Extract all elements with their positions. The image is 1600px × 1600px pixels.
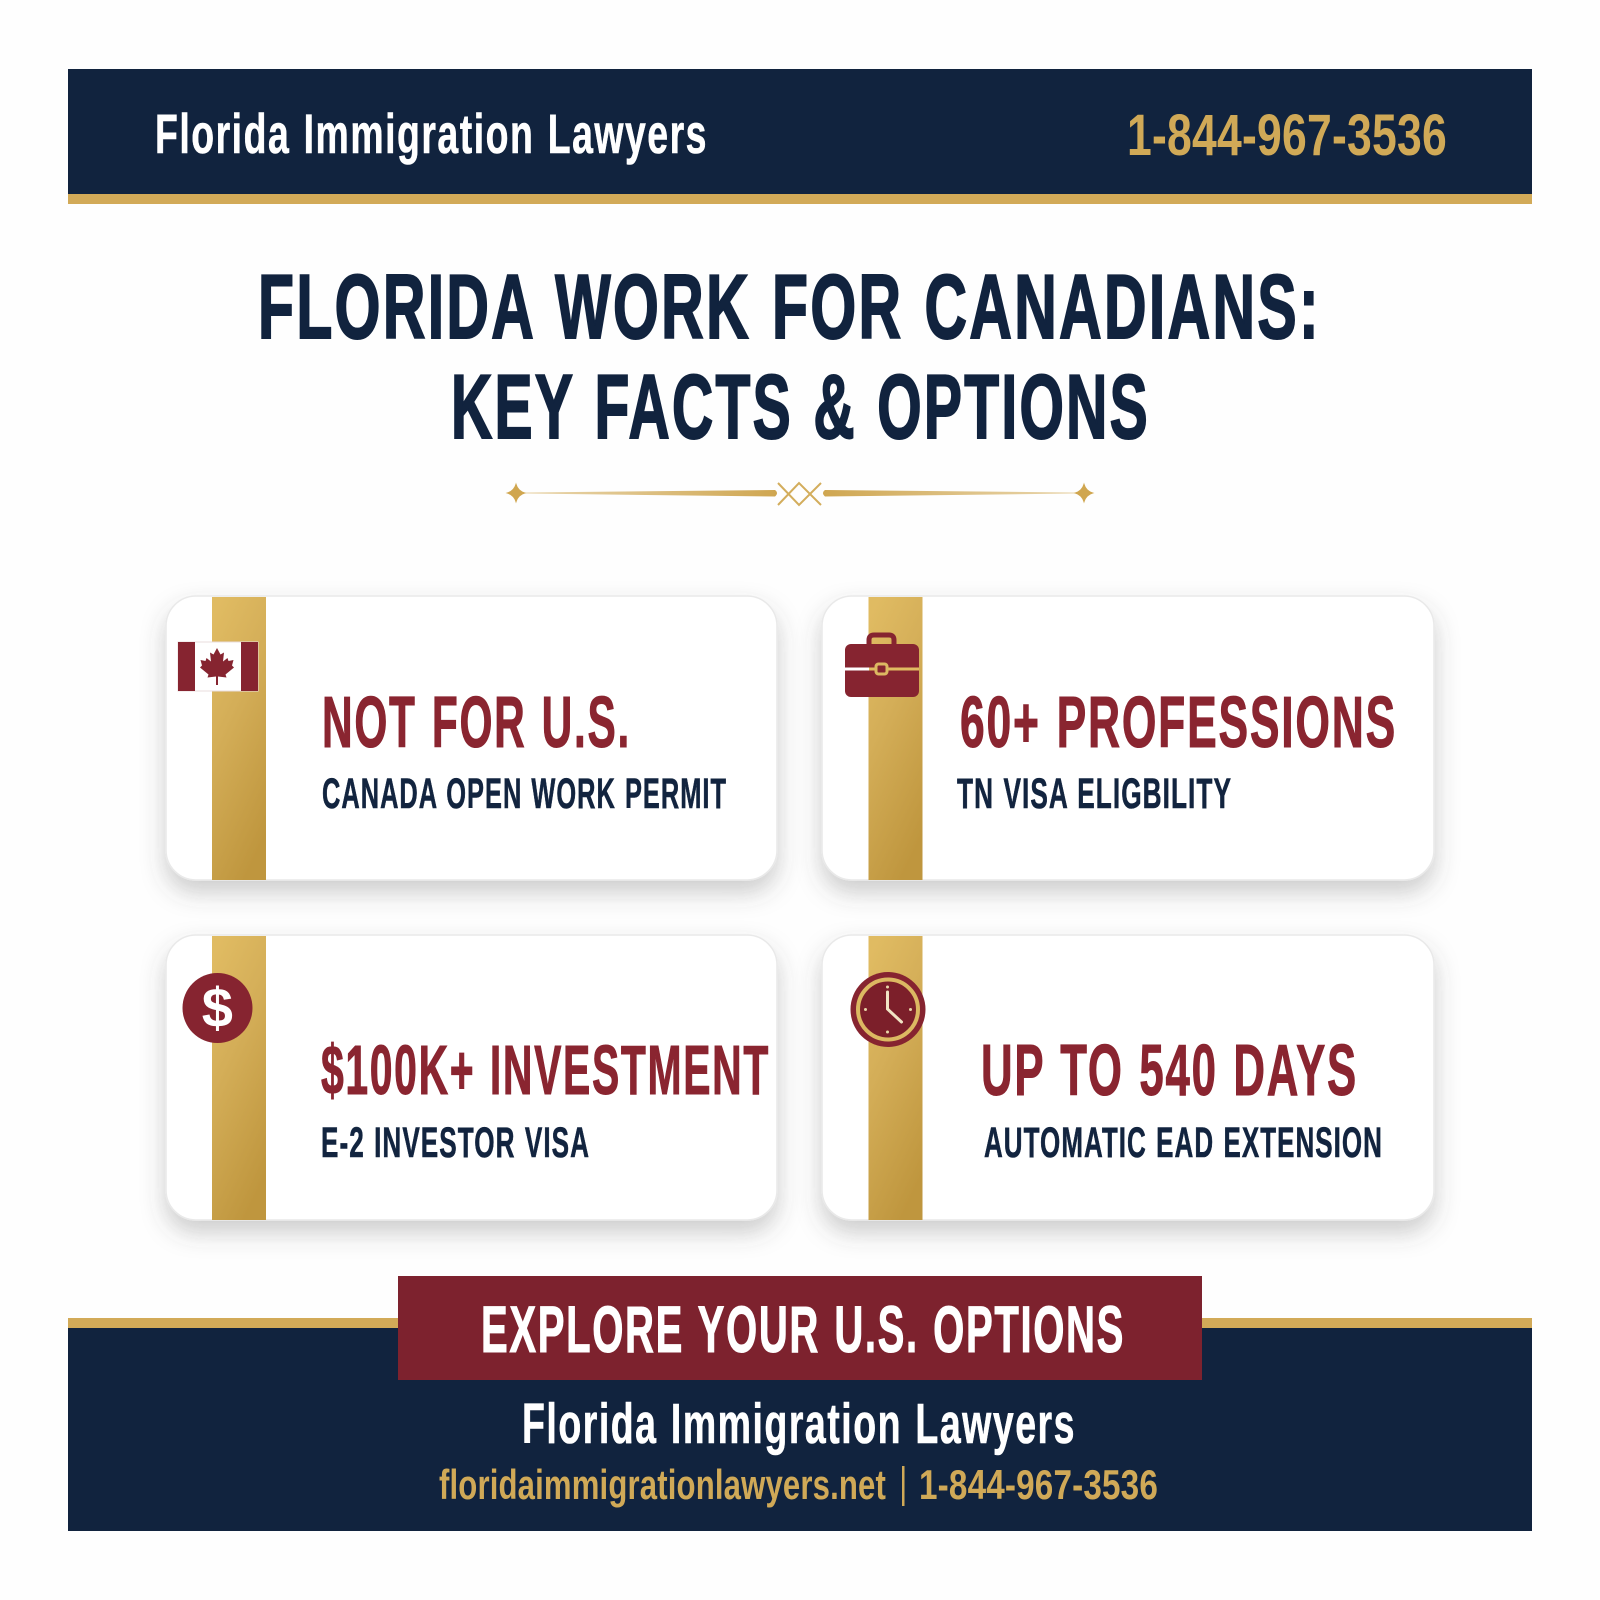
panel: not for U.S.: [166, 596, 777, 880]
footer website and phone: floridaimmigrationlawyers.net: [439, 1461, 886, 1508]
header firm name: Florida Immigration Lawyers: [155, 102, 708, 165]
subheading: E-2 investor visa: E-2 INVESTOR VISA: [321, 1119, 590, 1167]
icon: Canadian flag: [178, 642, 258, 691]
subheading: TN visa eligibility: TN VISA ELIGBILITY: [957, 770, 1232, 818]
title ornament divider: [507, 483, 1093, 505]
call to action banner: [398, 1276, 1202, 1380]
subheading: Canada open work permit: CANADA OPEN WORK PERMIT: [322, 770, 727, 818]
icon: dollar coin: $: [202, 976, 233, 1039]
call to action banner: EXPLORE YOUR U.S. OPTIONS: [481, 1292, 1125, 1366]
heading: up to 540 days: UP TO 540 DAYS: [981, 1031, 1358, 1111]
panel: up to 540 days: [822, 935, 1434, 1220]
heading: $100K+ investment: $100K+ INVESTMENT: [321, 1031, 770, 1109]
header bar: [68, 69, 1532, 204]
icon: briefcase: [845, 635, 919, 697]
heading: not for U.S.: NOT FOR U.S.: [322, 683, 631, 763]
footer website and phone: 1-844-967-3536: [919, 1461, 1158, 1508]
icon: clock: [850, 972, 926, 1047]
icon: dollar coin: [182, 973, 252, 1043]
footer firm name: Florida Immigration Lawyers: [522, 1392, 1076, 1456]
panel: 60+ professions: [822, 596, 1434, 880]
panel: $100K+ investment: [166, 935, 777, 1220]
title: KEY FACTS & OPTIONS: [451, 357, 1150, 458]
footer band: [68, 1276, 1532, 1531]
title: [258, 257, 1321, 458]
header phone number: 1-844-967-3536: [1127, 103, 1447, 168]
